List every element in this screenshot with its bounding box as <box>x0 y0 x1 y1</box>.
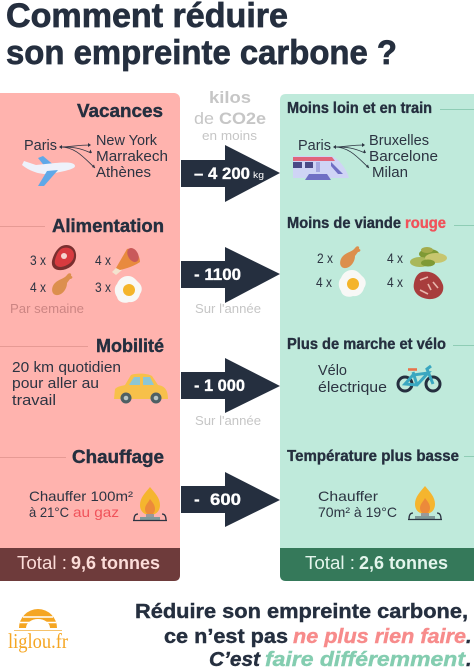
total bar: 9,6 tonnes: Total : <box>17 553 67 573</box>
title <box>6 0 397 72</box>
train destinations: Milan <box>372 164 408 181</box>
closing message: ce n’est pas <box>164 626 288 648</box>
text: heating with gas: au gaz <box>73 504 119 520</box>
icon: drumstick <box>340 246 360 268</box>
flight destinations: New York <box>96 132 157 149</box>
total bar: 9,6 tonnes: 9,6 tonnes <box>71 553 160 573</box>
panel: reduced footprint <box>280 94 474 581</box>
column header: kilos de CO2e en moins: de <box>194 109 214 128</box>
divider line: Alimentation <box>0 226 45 227</box>
text: commute: travail <box>12 392 56 409</box>
column header: kilos de CO2e en moins <box>194 88 266 143</box>
food quantities: 4 x <box>95 252 111 268</box>
food quantities <box>316 250 403 290</box>
divider line: Mobilité <box>0 346 88 347</box>
train destinations: Paris <box>298 137 331 154</box>
arrow: mobilité -1000: - 1 000 <box>194 376 245 395</box>
panel: current footprint <box>0 93 180 581</box>
icon: fried egg <box>115 276 142 303</box>
heading: Chauffage: Chauffage <box>72 446 164 467</box>
heading: Moins loin et en train: Moins loin et en train <box>287 100 432 117</box>
text: lower heating <box>318 488 397 520</box>
column header: kilos de CO2e en moins: en moins <box>202 128 258 143</box>
logo: liglou.fr <box>8 609 68 653</box>
total bar: 2,6 tonnes: 2,6 tonnes <box>359 553 448 573</box>
train destinations <box>298 132 438 181</box>
text: lower heating: 70m² à 19°C <box>318 504 397 520</box>
caption: Sur l'année: Sur l'année <box>195 414 261 428</box>
text: electric bike <box>318 362 387 396</box>
divider line: Chauffage <box>0 457 66 458</box>
icon: lentils <box>410 247 447 267</box>
closing message <box>135 601 472 670</box>
food quantities: 2 x <box>317 250 333 266</box>
heading: Plus de marche et vélo: Plus de marche et vélo <box>287 336 446 353</box>
food quantities: 4 x <box>387 274 403 290</box>
arrow: alimentation -1100: - 1100 <box>194 265 241 284</box>
food quantities <box>30 252 111 295</box>
text: heating with gas: à 21°C <box>29 504 69 520</box>
heading: Température plus basse: Température plus basse <box>287 448 459 465</box>
icon: train <box>293 156 349 180</box>
icon: fried egg <box>339 270 366 297</box>
text: heating with gas <box>29 488 133 520</box>
arrow: alimentation -1100 <box>181 247 280 303</box>
arrow: mobilité -1000 <box>181 358 280 413</box>
food quantities: 3 x <box>95 279 111 295</box>
icon: gas flame <box>408 486 442 520</box>
text: heating with gas: Chauffer 100m² <box>29 488 133 504</box>
flight destinations: Athènes <box>96 164 151 181</box>
train destinations: Bruxelles <box>369 132 429 149</box>
icon: red beans <box>414 272 443 299</box>
food quantities: 4 x <box>387 250 403 266</box>
total bar: 2,6 tonnes: Total : <box>305 553 355 573</box>
text: electric bike: Vélo <box>318 362 347 379</box>
text: commute: pour aller au <box>12 375 99 392</box>
icon: drumstick <box>52 273 72 295</box>
arrow: chauffage -600: 600 <box>210 490 241 509</box>
food quantities: 4 x <box>30 279 46 295</box>
arrow: chauffage -600 <box>181 472 280 527</box>
food quantities: 3 x <box>30 252 46 268</box>
flight destinations <box>24 132 168 181</box>
text: lower heating: Chauffer <box>318 488 378 504</box>
icon: car <box>114 374 168 404</box>
heading: Moins de viande rouge: Moins de viande <box>287 215 401 232</box>
icon: gas flame <box>133 487 167 520</box>
arrow: vacances -4200 kg: kg <box>253 170 264 181</box>
arrow: vacances -4200 kg: – 4 200 <box>194 164 250 183</box>
train destinations: Barcelone <box>369 148 438 165</box>
arrow: chauffage -600: - <box>194 490 200 509</box>
flight destinations: Paris <box>24 137 57 154</box>
caption: Sur l'année: Sur l'année <box>195 302 261 316</box>
icon: steak <box>52 245 76 270</box>
closing message: Réduire son empreinte carbone, <box>135 601 468 623</box>
flight destinations: Marrakech <box>96 148 168 165</box>
icon: ham <box>112 246 141 275</box>
total bar: 9,6 tonnes <box>0 548 180 581</box>
icon: bicycle <box>398 366 440 391</box>
arrow: vacances -4200 kg <box>181 145 280 202</box>
heading: Alimentation: Alimentation <box>52 215 164 236</box>
food quantities: 4 x <box>316 274 332 290</box>
note: Par semaine: Par semaine <box>10 301 84 316</box>
logo: liglou.fr: liglou.fr <box>8 629 68 653</box>
heading: Vacances: Vacances <box>77 100 163 121</box>
total bar: 2,6 tonnes <box>280 548 474 581</box>
text: electric bike: électrique <box>318 379 387 396</box>
closing message: ne plus rien faire <box>293 626 466 648</box>
icon: airplane <box>22 156 75 186</box>
text: commute <box>12 359 121 409</box>
heading: Mobilité: Mobilité <box>96 335 164 356</box>
heading: Moins de viande rouge: rouge <box>405 215 446 232</box>
text: commute: 20 km quotidien <box>12 359 121 376</box>
column header: kilos de CO2e en moins: CO2e <box>219 109 266 128</box>
closing message: . <box>466 626 472 648</box>
column header: kilos de CO2e en moins: kilos <box>209 88 251 107</box>
title: son empreinte carbone ? <box>6 34 397 72</box>
